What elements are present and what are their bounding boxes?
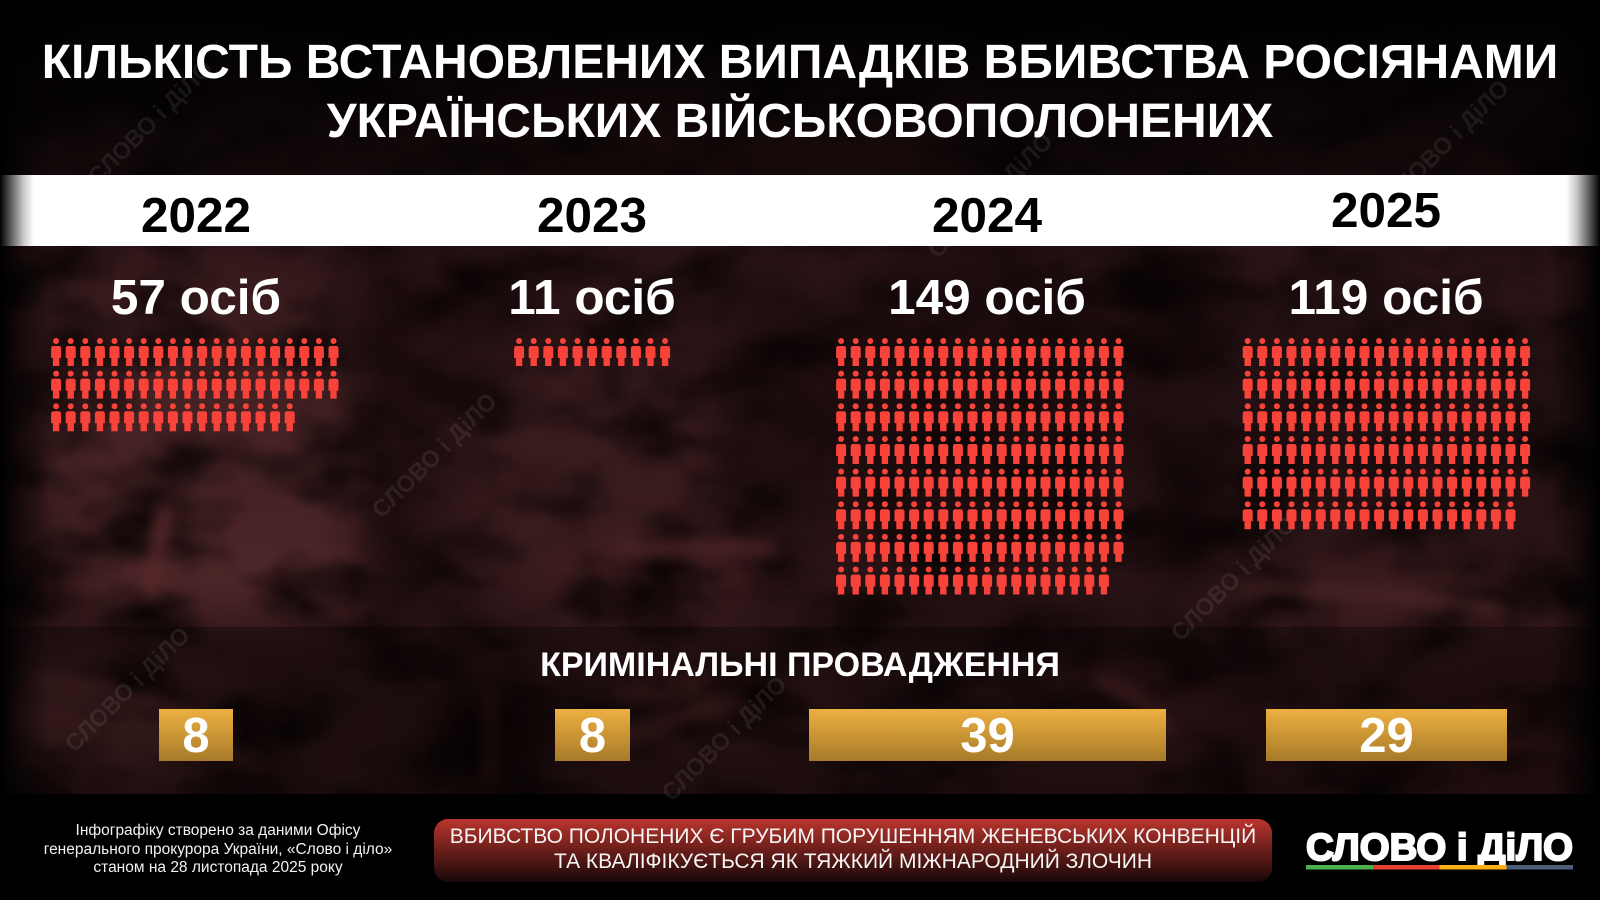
watermarks: СЛОВО і ДіЛО [60,622,196,758]
year 2025: 2025 [1331,183,1441,238]
bar 2024: 39: 39 [960,709,1015,763]
count 2025: 119 осіб [1288,270,1484,325]
source note [44,822,392,876]
count 2022: 57 осіб [111,270,281,325]
bar 2022: 8: 8 [182,709,210,763]
count 2024: 149 осіб [888,270,1086,325]
title: УКРАЇНСЬКИХ ВІЙСЬКОВОПОЛОНЕНИХ [327,95,1273,148]
pictogram 2023 [514,338,670,366]
callout: war crime statement: ТА КВАЛІФІКУЄТЬСЯ ЯК ТЯЖКИЙ МІЖНАРОДНИЙ ЗЛОЧИН [554,850,1152,873]
bar 2024: 39 [809,709,1166,761]
watermarks: СЛОВО і ДіЛО [83,55,219,191]
pictogram 2025 [1243,338,1530,529]
callout: war crime statement [434,819,1272,882]
year 2022: 2022 [141,188,251,243]
logo wordmark: СЛОВО і ДіЛО [1306,827,1573,869]
watermarks: СЛОВО і ДіЛО [367,388,503,524]
watermarks: СЛОВО і ДіЛО [1379,75,1515,211]
lower dark band [0,627,1600,794]
watermarks: СЛОВО і ДіЛО [923,128,1059,264]
pictogram 2022 [51,338,338,431]
bar 2022: 8 [159,709,233,761]
pictogram 2024 [836,338,1124,595]
title [42,36,1558,148]
bar 2025: 29 [1266,709,1507,761]
title: КІЛЬКІСТЬ ВСТАНОВЛЕНИХ ВИПАДКІВ ВБИВСТВА РОСІЯНАМИ [42,36,1558,89]
count 2023: 11 осіб [508,270,676,325]
watermarks: СЛОВО і ДіЛО [657,671,793,807]
source note: Інфографіку створено за даними Офісу [76,822,360,839]
source note: станом на 28 листопада 2025 року [93,859,343,876]
heading: criminal proceedings: КРИМІНАЛЬНІ ПРОВАДЖЕННЯ [540,646,1060,684]
year 2023: 2023 [537,188,647,243]
logo stripe [1306,865,1573,870]
callout: war crime statement: ВБИВСТВО ПОЛОНЕНИХ Є ГРУБИМ ПОРУШЕННЯМ ЖЕНЕВСЬКИХ КОНВЕНЦІЙ [450,825,1256,848]
year 2024: 2024 [932,188,1042,243]
source note: генерального прокурора України, «Слово і діло» [44,841,392,858]
bar 2023: 8 [555,709,630,761]
bar 2025: 29: 29 [1359,709,1414,763]
bar 2023: 8: 8 [579,709,606,763]
year band [0,175,1600,246]
watermarks: СЛОВО і ДіЛО [1166,511,1302,647]
